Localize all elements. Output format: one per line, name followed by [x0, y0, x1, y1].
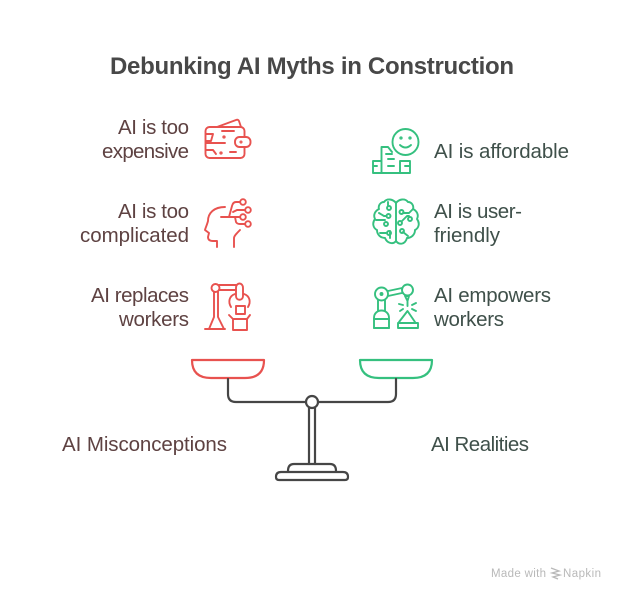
reality text: AI is user-friendly: AI is user-	[434, 200, 522, 223]
reality text: AI is affordable: AI is affordable	[434, 140, 569, 163]
label: AI Realities: AI Realities	[431, 433, 529, 456]
watermark: Made with Napkin: Napkin	[563, 568, 601, 580]
scale: left pan	[192, 360, 264, 378]
myth text: AI is too complicated	[80, 200, 189, 247]
reality text: AI empowers workers: workers	[433, 308, 504, 331]
icon: smiling face and buildings	[373, 129, 418, 173]
myth text: AI is too expensive: expensive	[102, 140, 189, 163]
icon: head with circuit nodes	[205, 199, 251, 247]
reality text: AI empowers workers: AI empowers	[434, 284, 551, 307]
reality text: AI is user-friendly: friendly	[434, 224, 501, 247]
myth text: AI is too expensive: AI is too	[118, 116, 189, 139]
myth text: AI replaces workers: AI replaces	[91, 284, 189, 307]
myth text: AI replaces workers: workers	[118, 308, 189, 331]
scale: base	[276, 464, 348, 480]
title: Debunking AI Myths in Construction	[110, 53, 514, 80]
myth text: AI is too complicated: AI is too	[118, 200, 189, 223]
scale: beam	[228, 379, 396, 402]
label: AI Misconceptions: AI Misconceptions	[62, 433, 227, 456]
scale: right pan	[360, 360, 432, 378]
icon: wallet with circuit	[206, 120, 250, 158]
reality text: AI is user-friendly	[434, 200, 522, 247]
icon: brain with circuit	[373, 199, 419, 244]
watermark: Made with Napkin	[491, 568, 601, 580]
scale: pivot	[306, 396, 318, 408]
watermark: Made with Napkin: Made with	[491, 568, 546, 580]
myth text: AI is too expensive	[102, 116, 189, 163]
icon: robotic arm replacing worker	[205, 284, 250, 330]
scale: post	[309, 408, 315, 464]
reality text: AI empowers workers	[433, 284, 551, 331]
myth text: AI is too complicated: complicated	[80, 224, 189, 247]
icon: robotic arm with sparks	[374, 284, 418, 328]
myth text: AI replaces workers	[91, 284, 189, 331]
balance scale	[192, 360, 432, 480]
